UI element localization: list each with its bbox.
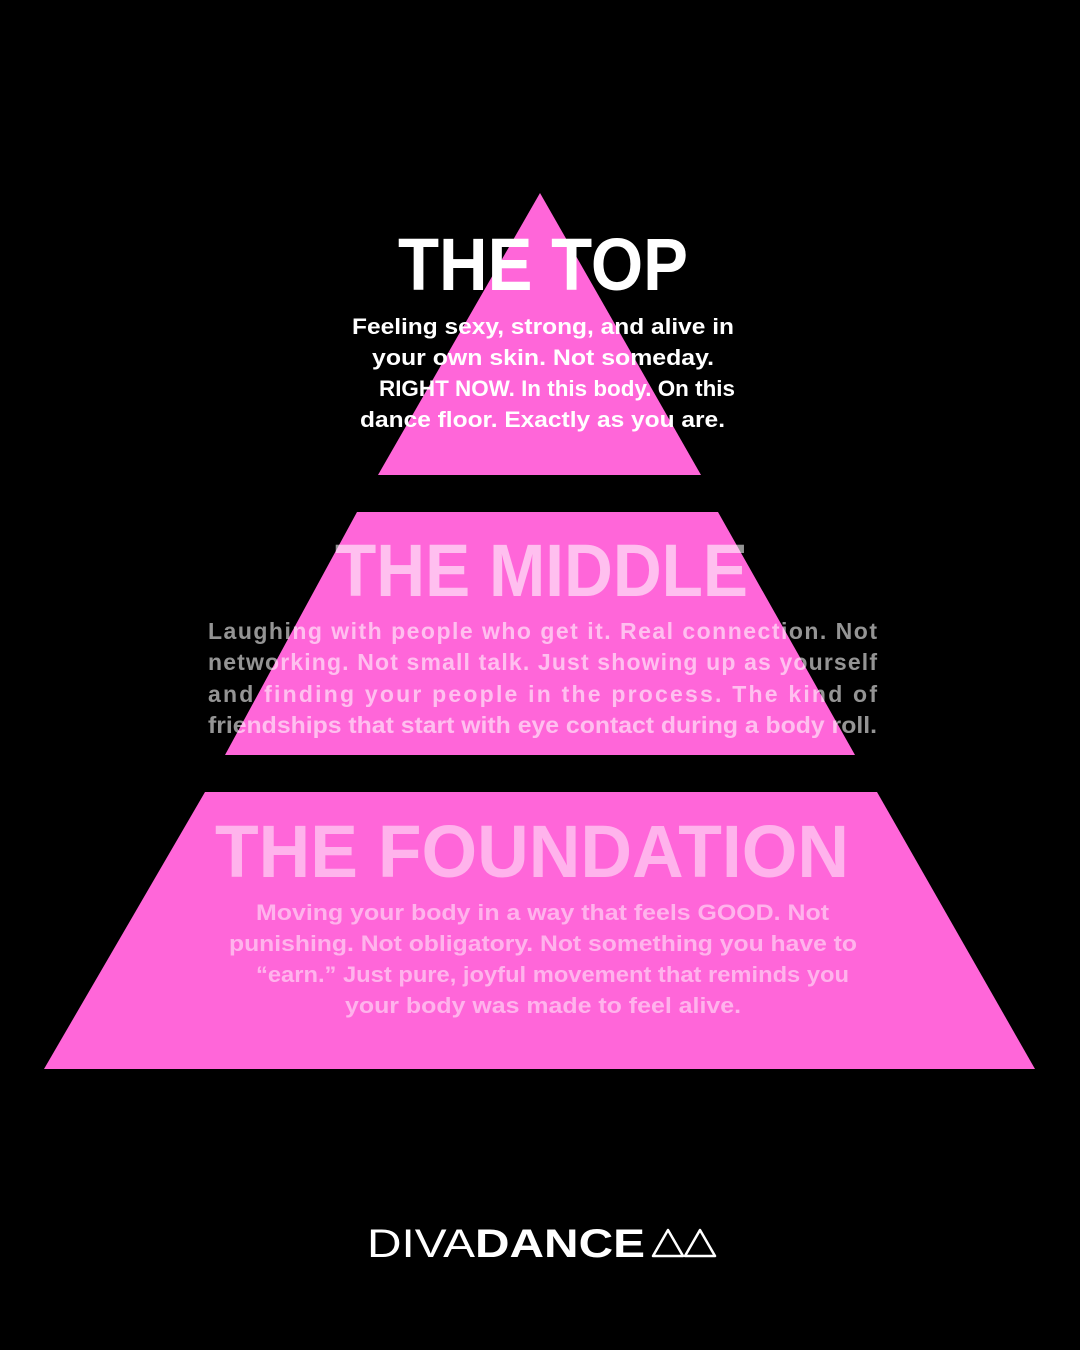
panel: foundation trapezoid — [44, 792, 1035, 1069]
panel: middle trapezoid — [208, 512, 877, 755]
text block: middle description — [208, 618, 877, 738]
heading: THE MIDDLE: THE MIDDLE — [335, 529, 748, 612]
text block: foundation description: your body was made to feel alive. — [345, 993, 741, 1018]
text block: middle description: Laughing with people who get it. Real connection. Not — [208, 618, 877, 644]
text block: foundation description: punishing. Not obligatory. Not something you have to — [229, 931, 857, 956]
text block: middle description: networking. Not small talk. Just showing up as yourself — [208, 649, 877, 675]
text block: top description: your own skin. Not someday. — [372, 345, 714, 370]
text block: top description: Feeling sexy, strong, and alive in — [352, 314, 734, 339]
text block: top description — [352, 314, 735, 432]
text block: middle description: friendships that start with eye contact during a body roll. — [208, 712, 877, 738]
logo: DIVADANCE: DIVA DANCE — [367, 1222, 645, 1266]
text block: top description: dance floor. Exactly as you are. — [360, 407, 725, 432]
heading: THE FOUNDATION: THE FOUNDATION — [215, 810, 849, 893]
icon: logo triangles — [653, 1230, 715, 1256]
text block: foundation description: “earn.” Just pure, joyful movement that reminds you — [256, 962, 849, 987]
text block: top description: RIGHT NOW. In this body. On this — [379, 376, 735, 401]
text block: foundation description — [229, 900, 857, 1018]
heading: THE TOP: THE TOP — [398, 223, 688, 306]
text block: foundation description: Moving your body in a way that feels GOOD. Not — [256, 900, 830, 925]
text block: middle description: and finding your people in the process. The kind of — [208, 681, 877, 707]
panel: top triangle — [352, 193, 735, 475]
